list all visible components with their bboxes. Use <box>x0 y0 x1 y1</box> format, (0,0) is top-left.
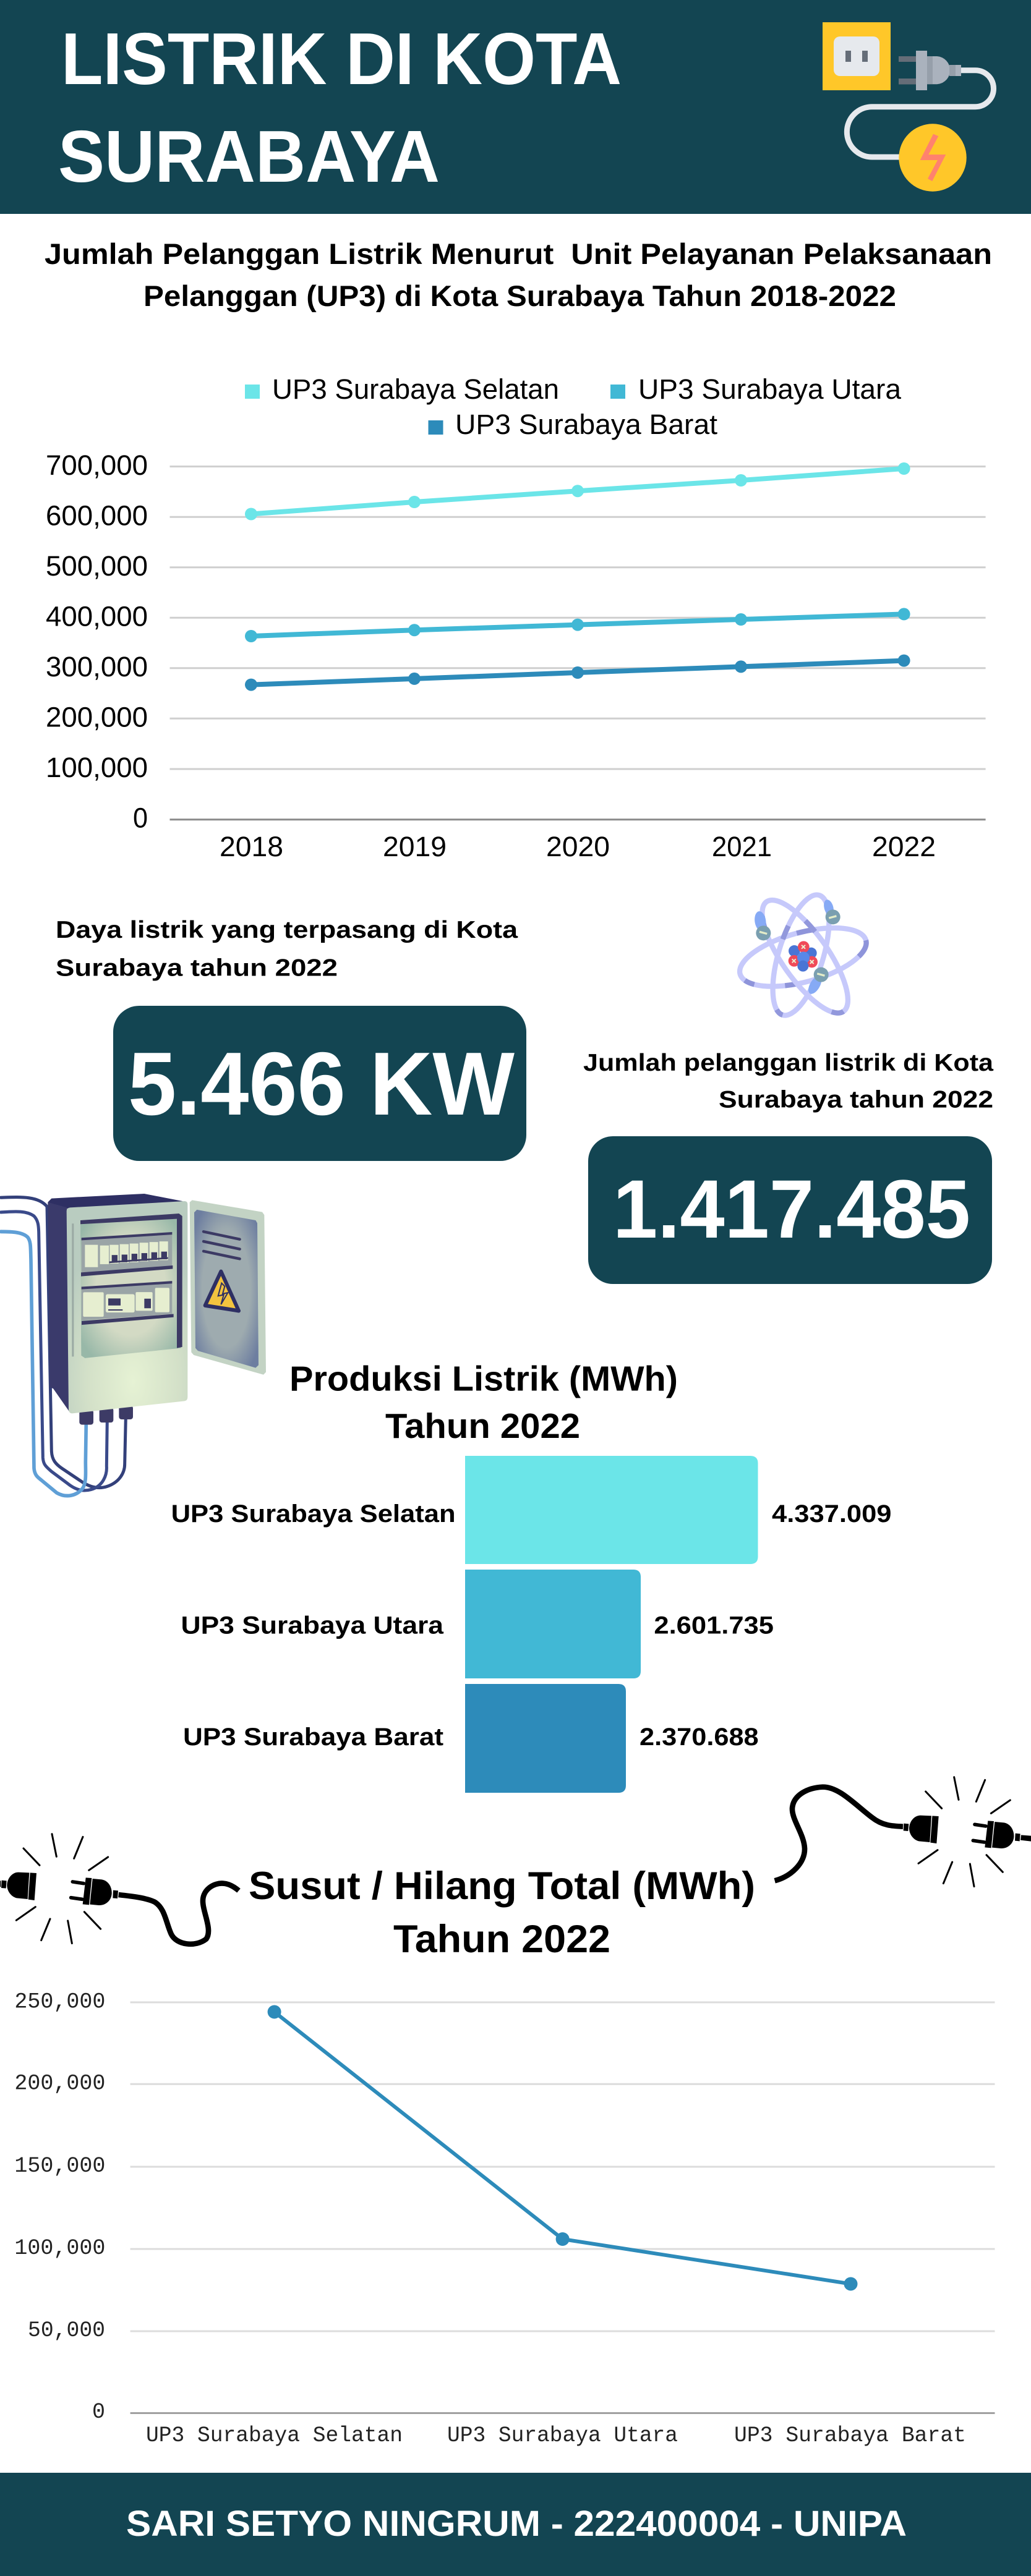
x axis labels: UP3 Surabaya Barat <box>734 2423 966 2448</box>
icon: socket, plug and power cable <box>823 22 993 192</box>
y axis labels: 200,000 <box>14 2071 105 2096</box>
y axis labels: 100,000 <box>14 2236 105 2261</box>
heading: customers chart: Pelanggan (UP3) di Kota Surabaya Tahun 2018-2022 <box>143 279 896 312</box>
chart legend: UP3 Surabaya Barat <box>455 409 718 440</box>
series: UP3 Surabaya Utara <box>245 608 910 642</box>
panel: footer: SARI SETYO NINGRUM - 222400004 - UNIPA <box>126 2504 907 2544</box>
text: customers label: Jumlah pelanggan listrik di Kota <box>583 1050 993 1076</box>
text: installed power label: Surabaya tahun 2022 <box>56 955 338 982</box>
x axis labels: 2018 <box>220 831 283 862</box>
text: customers label: Surabaya tahun 2022 <box>719 1087 993 1113</box>
x axis labels: 2021 <box>712 831 772 862</box>
line chart: total losses per UP3 <box>14 1990 995 2448</box>
icon: atom <box>734 888 872 1024</box>
y axis labels: 400,000 <box>46 601 148 632</box>
series: UP3 Surabaya Selatan <box>245 462 910 521</box>
chart legend <box>245 373 902 440</box>
y axis labels: 300,000 <box>46 651 148 682</box>
x axis labels: 2020 <box>546 831 610 862</box>
bar: UP3 Surabaya Utara: 2.601.735 <box>654 1612 774 1639</box>
text: installed power label <box>56 917 518 982</box>
heading: electricity production <box>289 1359 678 1446</box>
bar: UP3 Surabaya Barat: 2.370.688 <box>640 1724 759 1751</box>
x axis labels: UP3 Surabaya Utara <box>447 2423 678 2448</box>
chart legend: UP3 Surabaya Utara <box>638 373 902 405</box>
icon: electrical panel cabinet <box>1 1194 266 1496</box>
bar: UP3 Surabaya Selatan <box>171 1456 892 1564</box>
y axis labels: 50,000 <box>28 2318 105 2343</box>
icon: unplugged cable left <box>0 1834 239 1944</box>
y axis labels: 600,000 <box>46 499 148 531</box>
callout: installed power value <box>113 1006 526 1161</box>
x axis labels: 2019 <box>383 831 447 862</box>
y axis labels: 0 <box>92 2400 105 2425</box>
y axis labels: 250,000 <box>14 1990 105 2015</box>
bar: UP3 Surabaya Utara <box>181 1570 774 1678</box>
y axis labels: 100,000 <box>46 752 148 783</box>
title: LISTRIK DI KOTA <box>61 18 622 100</box>
heading: customers chart: Jumlah Pelanggan Listrik Menurut Unit Pelayanan Pelaksanaan <box>45 237 992 270</box>
bar: UP3 Surabaya Barat: UP3 Surabaya Barat <box>183 1724 443 1751</box>
bar: UP3 Surabaya Barat <box>183 1684 759 1793</box>
x axis labels: 2022 <box>872 831 936 862</box>
y axis labels: 500,000 <box>46 550 148 582</box>
text: installed power label: Daya listrik yang terpasang di Kota <box>56 917 518 943</box>
bar chart: production per UP3 <box>171 1456 892 1793</box>
panel: footer <box>0 2473 1031 2576</box>
heading: electricity production: Tahun 2022 <box>385 1406 580 1446</box>
series: UP3 Surabaya Barat <box>245 655 910 691</box>
x axis labels <box>146 2423 966 2448</box>
heading: electricity production: Produksi Listrik (MWh) <box>289 1359 678 1398</box>
title: SURABAYA <box>58 116 440 198</box>
data line <box>268 2005 858 2291</box>
line chart: customers per UP3 2018-2022 <box>46 373 986 862</box>
heading: losses: Susut / Hilang Total (MWh) <box>249 1864 755 1908</box>
y axis labels: 200,000 <box>46 701 148 733</box>
title <box>58 18 622 198</box>
text: customers label <box>583 1050 993 1113</box>
callout: total customers value <box>588 1136 992 1284</box>
y axis labels <box>14 1990 105 2425</box>
callout: installed power value: 5.466 KW <box>128 1034 515 1134</box>
heading: losses <box>249 1864 755 1961</box>
callout: total customers value: 1.417.485 <box>613 1163 970 1256</box>
x axis labels <box>220 831 936 862</box>
x axis labels: UP3 Surabaya Selatan <box>146 2423 403 2448</box>
y axis labels: 0 <box>133 802 148 833</box>
y axis labels: 700,000 <box>46 449 148 481</box>
bar: UP3 Surabaya Selatan: 4.337.009 <box>772 1500 892 1528</box>
y axis labels <box>46 449 148 833</box>
bar: UP3 Surabaya Utara: UP3 Surabaya Utara <box>181 1612 444 1639</box>
y axis labels: 150,000 <box>14 2154 105 2179</box>
bar: UP3 Surabaya Selatan: UP3 Surabaya Selatan <box>171 1500 456 1528</box>
heading: customers chart <box>45 237 992 312</box>
icon: unplugged cable right <box>775 1777 1031 1887</box>
panel: header <box>0 0 1031 214</box>
heading: losses: Tahun 2022 <box>393 1918 610 1961</box>
chart legend: UP3 Surabaya Selatan <box>272 373 559 405</box>
